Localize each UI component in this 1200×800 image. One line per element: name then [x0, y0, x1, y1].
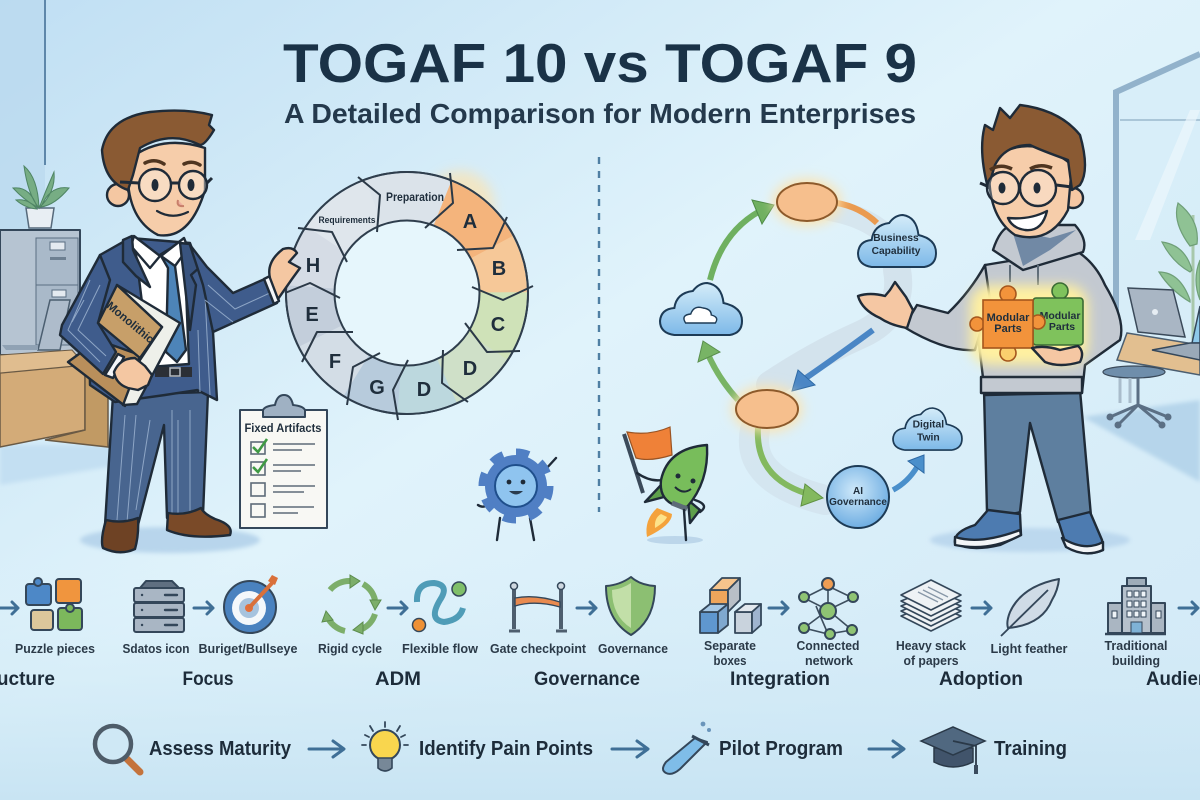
migration roadmap row: [95, 722, 1067, 774]
lower book cover behind the arm: [68, 340, 140, 406]
ADM comparison: Flexible flow: [402, 641, 479, 656]
green arrow to top node: [710, 200, 774, 280]
audience comparison: building: [1112, 653, 1160, 668]
arrow: [309, 741, 344, 757]
open hand: [858, 282, 913, 328]
step: pilot program: [663, 722, 843, 774]
AI governance sphere: [827, 466, 889, 528]
clipboard: fixed artifacts checklist: Fixed Artifacts: [244, 421, 322, 435]
green puzzle piece: [1033, 283, 1083, 345]
digital twin cloud: Digital: [913, 420, 944, 430]
audience comparison: Traditional: [1104, 638, 1168, 653]
gear mascot: [478, 453, 556, 540]
digital twin cloud: [893, 408, 962, 450]
governance comparison: [490, 577, 668, 690]
focus comparison: Buriget/Bullseye: [198, 641, 298, 656]
integration comparison: Integration: [730, 669, 830, 690]
character: modern architect in hoodie: [858, 105, 1130, 553]
suit trousers: [105, 392, 208, 528]
audience comparison: [1104, 578, 1200, 690]
business capability cloud: Business: [873, 233, 919, 244]
business capability cloud: [858, 215, 936, 267]
glowing modular puzzle pieces: [970, 283, 1088, 365]
ADM cycle ring, TOGAF 9: G: [369, 377, 385, 399]
ghost bands: [754, 210, 898, 500]
step: training: Training: [994, 738, 1067, 760]
sneakers: [955, 510, 1103, 553]
book labelled Monolithic: [98, 285, 180, 405]
ADM cycle ring, TOGAF 9: E: [305, 304, 319, 326]
adoption comparison: of papers: [904, 653, 958, 668]
blue arrow: [792, 330, 873, 391]
focus comparison: [122, 575, 298, 690]
integration comparison: Connected: [796, 638, 860, 653]
ADM cycle ring, TOGAF 9: Preparation: [386, 190, 444, 204]
orange puzzle piece: [970, 286, 1045, 361]
ADM cycle ring, TOGAF 9: D: [417, 379, 431, 401]
blue arrow to digital twin: [893, 455, 924, 490]
bottom node: [732, 386, 802, 432]
hand on book: [105, 354, 152, 390]
step: assess maturity: [95, 726, 292, 772]
ADM cycle ring, TOGAF 9: B: [492, 258, 506, 280]
subtitle: A Detailed Comparison for Modern Enterprises: [284, 98, 916, 129]
integration comparison: Separate: [704, 638, 756, 653]
character: traditional architect in pinstripe suit: [60, 111, 300, 553]
ADM comparison: Rigid cycle: [318, 641, 382, 656]
left office scene: cabinet, plant and desk: [0, 166, 108, 447]
AI governance sphere: AI: [853, 486, 863, 497]
step: identify pain points: Identify Pain Points: [419, 738, 593, 760]
digital twin cloud: Twin: [917, 433, 940, 443]
governance comparison: Governance: [534, 669, 640, 690]
ADM cycle ring, TOGAF 9: [273, 159, 541, 427]
flexible flow diagram, TOGAF 10: [660, 179, 962, 528]
jacket: [88, 236, 217, 402]
governance comparison: Governance: [598, 641, 668, 656]
adoption comparison: Light feather: [990, 641, 1068, 656]
comparison row: icons, labels and headings: [0, 575, 1200, 690]
divider between versions: [598, 157, 600, 512]
rocket mascot with flag: [624, 427, 707, 544]
green puzzle piece: Modular: [1040, 310, 1080, 322]
head with glasses: [102, 111, 214, 235]
orange puzzle piece: Parts: [994, 323, 1022, 335]
ADM cycle ring, TOGAF 9: C: [491, 314, 505, 336]
structure comparison: Puzzle pieces: [15, 641, 95, 656]
step: identify pain points: [362, 722, 593, 771]
head: [980, 105, 1085, 237]
structure comparison: [0, 578, 95, 690]
ADM comparison: ADM: [375, 669, 421, 690]
arrow: [869, 741, 904, 757]
top node: [773, 179, 841, 225]
title: TOGAF 10 vs TOGAF 9: [283, 32, 917, 94]
clipboard: fixed artifacts checklist: [240, 395, 327, 528]
business capability cloud: Capability: [872, 246, 921, 257]
step: assess maturity: Assess Maturity: [149, 738, 292, 760]
adoption comparison: Heavy stack: [896, 638, 967, 653]
book labelled Monolithic: Monolithic: [104, 300, 156, 346]
brown shoes: [102, 508, 231, 552]
arrow: [612, 741, 648, 757]
step: training: [921, 727, 1067, 774]
adoption comparison: [896, 579, 1068, 690]
jeans: [984, 390, 1091, 522]
right arm and hand touching the ring: [190, 245, 300, 332]
ADM comparison: [318, 575, 479, 690]
ADM cycle ring, TOGAF 9: F: [329, 351, 341, 373]
blank cloud: [660, 283, 742, 335]
orange puzzle piece: Modular: [987, 312, 1030, 324]
ADM cycle ring, TOGAF 9: D: [463, 358, 477, 380]
hoodie: [904, 225, 1121, 395]
hand under the puzzle pieces: [1032, 346, 1082, 365]
green arrow to blank cloud: [698, 341, 738, 400]
ADM cycle ring, TOGAF 9: Requirements: [318, 215, 376, 226]
right office scene: glass wall, plant, desk, laptop and chair: [1103, 54, 1200, 428]
green puzzle piece: Parts: [1049, 321, 1075, 333]
governance comparison: Gate checkpoint: [490, 641, 587, 656]
orange connector: [837, 203, 877, 223]
green curved arrow to AI node: [758, 428, 823, 506]
integration comparison: boxes: [714, 653, 746, 668]
step: pilot program: Pilot Program: [719, 738, 843, 760]
integration comparison: network: [805, 653, 854, 668]
focus comparison: Sdatos icon: [122, 641, 190, 656]
adoption comparison: Adoption: [939, 669, 1023, 690]
AI governance sphere: Governance: [829, 497, 887, 508]
ADM cycle ring, TOGAF 9: H: [306, 255, 320, 277]
ADM cycle ring, TOGAF 9: A: [463, 211, 477, 233]
left arm: [60, 255, 116, 374]
integration comparison: [700, 578, 860, 690]
focus comparison: Focus: [182, 669, 234, 690]
